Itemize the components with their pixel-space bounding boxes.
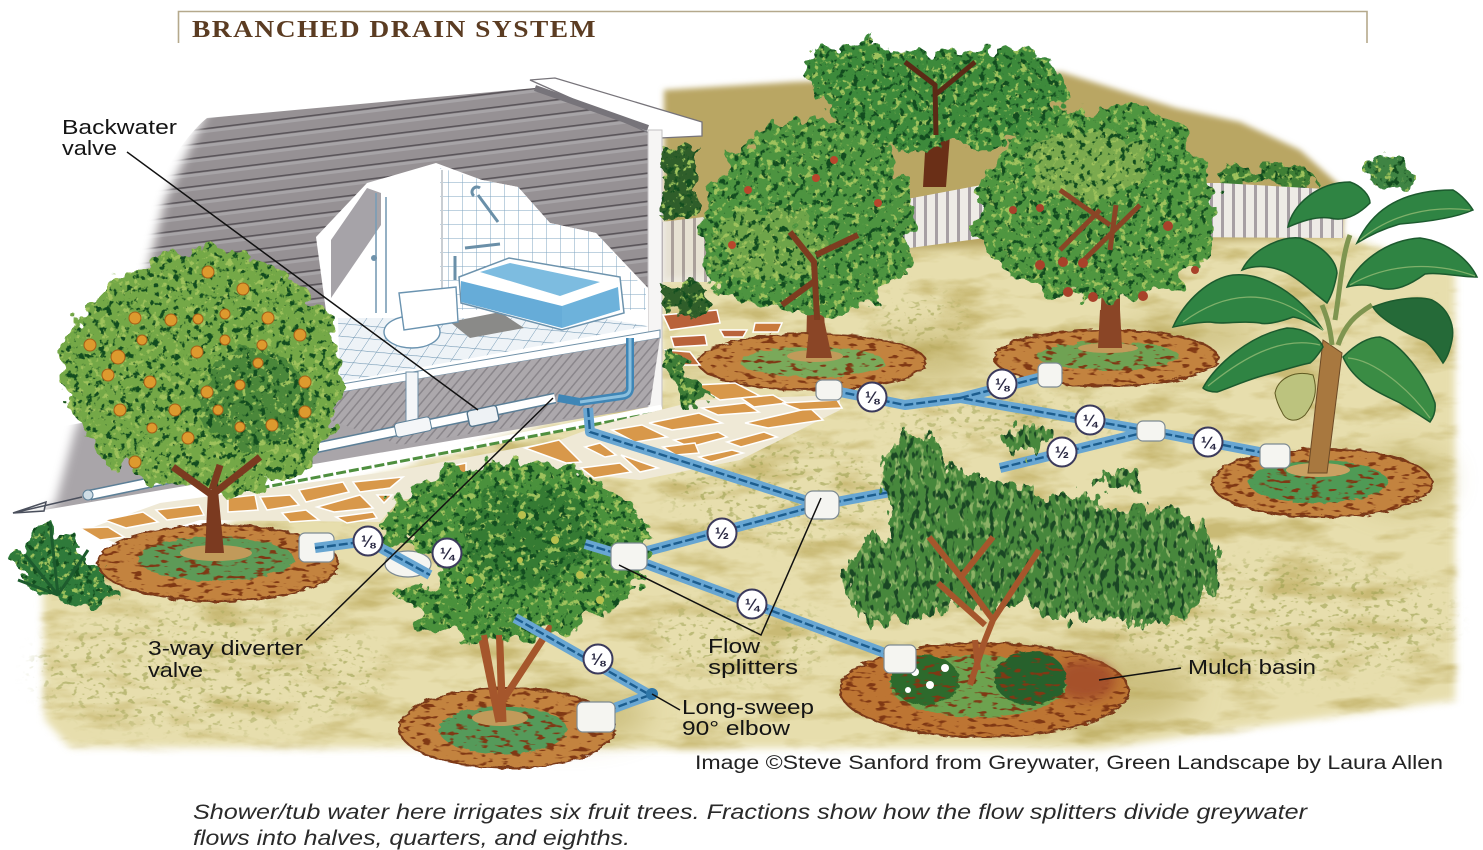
lawn xyxy=(43,237,1455,748)
fence xyxy=(661,183,1343,282)
shrub behind corner xyxy=(663,148,712,316)
label: elbow xyxy=(682,697,814,740)
banana plant xyxy=(1173,154,1477,473)
banana bunch xyxy=(1275,374,1315,420)
fraction labels: ⅛ xyxy=(865,388,881,407)
caption: Shower/tub water here irrigates six fruit trees. Fractions show how the flow splitters divide greywater xyxy=(193,801,1308,824)
leaves xyxy=(1173,182,1477,422)
support post xyxy=(406,372,418,432)
bathtub xyxy=(459,258,624,330)
fraction labels xyxy=(361,375,1217,669)
fraction labels: ½ xyxy=(715,524,729,543)
far back tree xyxy=(800,45,1065,187)
splitter xyxy=(611,543,647,570)
indoor vertical blue pipe xyxy=(558,338,630,402)
grass tufts xyxy=(35,295,1450,730)
fraction labels: ¼ xyxy=(745,595,761,614)
fraction labels: ½ xyxy=(1055,443,1069,462)
label: diverter valve xyxy=(148,638,303,682)
caption xyxy=(193,801,1308,850)
path base xyxy=(85,395,840,545)
acacia tree xyxy=(846,426,1218,685)
splitter xyxy=(1038,363,1062,387)
wall corner xyxy=(648,130,662,408)
hedge behind fence xyxy=(1220,165,1318,186)
orange tree xyxy=(58,248,342,553)
green edging xyxy=(234,412,660,493)
bathroom cutaway xyxy=(316,163,648,385)
mulch basin: apple xyxy=(994,310,1218,386)
greywater pipes: rear xyxy=(588,375,1275,655)
siding xyxy=(130,88,650,420)
flow splitters: rear xyxy=(299,363,1290,673)
title: BRANCHED DRAIN SYSTEM xyxy=(192,17,597,43)
fraction labels: ⅛ xyxy=(361,532,377,551)
back hillside xyxy=(664,72,1345,280)
illustration: garden backdrop xyxy=(43,72,1455,748)
fraction labels: ¼ xyxy=(440,544,456,563)
flow splitters: front xyxy=(577,543,647,732)
splitter xyxy=(884,645,916,673)
shadow patches on lawn xyxy=(490,320,1450,740)
fraction badges xyxy=(354,370,1222,674)
tree: back left xyxy=(702,118,911,357)
splitter xyxy=(805,491,839,519)
soft white left fade xyxy=(0,90,212,530)
foundation white edge xyxy=(100,408,662,520)
bathroom floor xyxy=(338,318,648,382)
fern xyxy=(15,522,120,606)
splitter xyxy=(816,380,842,400)
header frame xyxy=(178,12,1367,43)
floor slab xyxy=(336,330,660,393)
stepping stone path xyxy=(80,310,842,540)
drain pipe xyxy=(13,398,555,513)
tree: apple xyxy=(976,106,1214,347)
label: mulch basin: Mulch basin xyxy=(1188,657,1316,679)
crawl space xyxy=(330,338,660,445)
mulch basin: orange tree xyxy=(98,525,338,601)
image credit: Image ©Steve Sanford from Greywater, Green Landscape by Laura Allen xyxy=(695,753,1443,774)
label: backwater valve xyxy=(62,117,177,160)
splitter xyxy=(1137,421,1165,441)
label: flow splitters: splitters xyxy=(708,657,798,679)
splitter xyxy=(577,702,615,732)
fraction labels: ⅛ xyxy=(591,650,607,669)
toilet xyxy=(384,287,458,348)
fraction labels: ¼ xyxy=(1083,411,1099,430)
caption: flows into halves, quarters, and eighths. xyxy=(193,827,630,850)
mulch basin: banana xyxy=(1212,449,1432,517)
fraction labels: ⅛ xyxy=(995,375,1011,394)
house xyxy=(0,78,702,530)
splitter xyxy=(299,533,334,562)
label: elbow: 90° elbow xyxy=(682,718,791,740)
shower head and faucet xyxy=(455,187,500,280)
label: flow splitters: Flow xyxy=(708,636,761,658)
greywater pipes: front xyxy=(315,541,650,715)
shrub by corner xyxy=(664,350,708,402)
foundation wall xyxy=(15,325,660,515)
lemon tree xyxy=(384,461,648,722)
icon: backwater valve body xyxy=(467,405,499,427)
mulch basin: back left xyxy=(698,320,926,390)
mulch basin: lemon tree xyxy=(399,688,615,768)
label: diverter valve: 3-way diverter xyxy=(148,638,303,660)
label: elbow: Long-sweep xyxy=(682,697,814,719)
label: flow splitters xyxy=(708,636,798,679)
splitter xyxy=(1260,444,1290,468)
bathmat xyxy=(450,312,524,338)
trunk xyxy=(1308,340,1342,473)
elbow fitting xyxy=(646,688,658,700)
small leaf clump xyxy=(1365,154,1409,190)
label: backwater valve: valve xyxy=(62,138,117,160)
label: diverter valve: valve xyxy=(148,660,203,682)
roof xyxy=(530,78,702,138)
label: backwater valve: Backwater xyxy=(62,117,177,139)
fraction labels: ¼ xyxy=(1201,433,1217,452)
leader lines xyxy=(127,152,1181,710)
mulch basin: large xyxy=(840,643,1128,737)
stem xyxy=(1322,235,1372,345)
splitter xyxy=(385,551,431,577)
